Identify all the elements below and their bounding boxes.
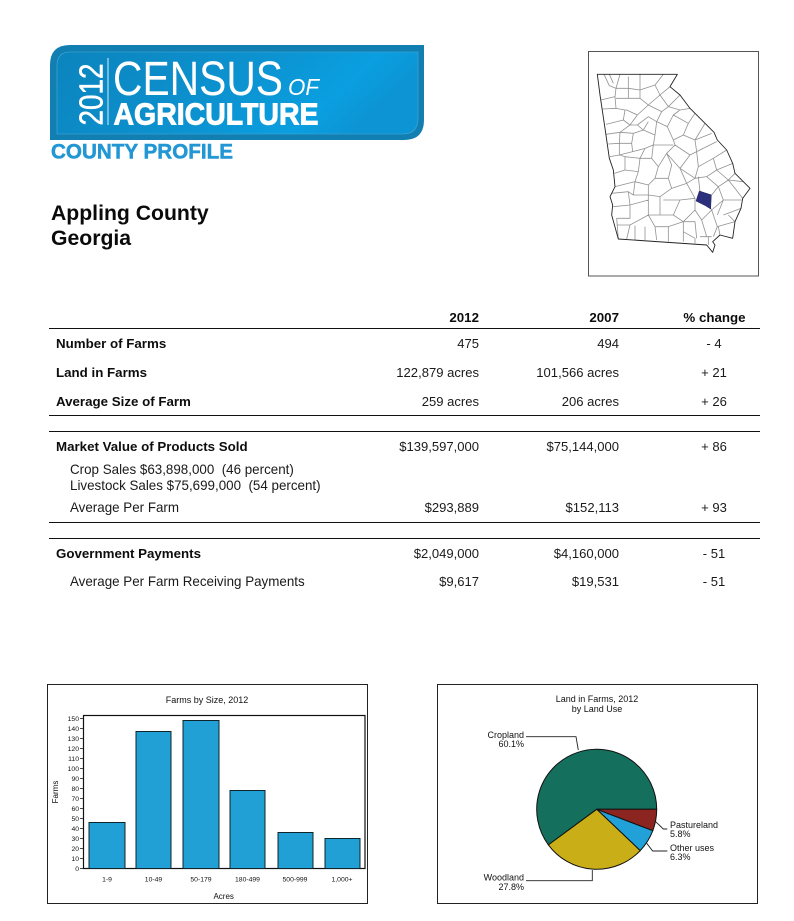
county profile subtitle: COUNTY PROFILE [51,140,233,164]
label: cropland [487,730,524,749]
row: number of farms: - 4 [706,336,722,351]
x axis tick labels: 1-9 [102,876,112,884]
y axis tick labels: 30 [71,836,79,843]
row: land in farms: Land in Farms [56,365,147,380]
bar chart title: Farms by Size, 2012 [166,695,248,705]
row: average per farm: $152,113 [566,500,619,515]
y axis tick labels: 0 [75,866,79,873]
pie chart title: by Land Use [572,704,622,714]
row: number of farms: Number of Farms [56,336,166,351]
x axis tick labels: 10-49 [145,876,162,884]
label: pastureland: Pastureland [670,820,718,830]
pie chart title [556,694,638,714]
x axis tick labels: 500-999 [283,876,308,884]
label: cropland: Cropland [487,730,524,740]
y axis tick labels: 50 [71,816,79,823]
x axis title: Acres [213,892,234,901]
row: market value of products sold [56,439,727,454]
row: number of farms [56,336,722,351]
y axis tick labels: 150 [68,716,79,723]
row: government payments: - 51 [703,546,725,561]
x axis tick labels: 180-499 [235,876,260,884]
panel: farms by size bar chart [48,684,368,904]
map: county boundaries and state outline [597,74,750,252]
row: average per farm receiving payments: Average Per Farm Receiving Payments [70,574,305,589]
y axis tick labels: 140 [68,726,79,733]
table header: % change [683,310,746,325]
y axis tick labels: 40 [71,826,79,833]
row: land in farms: + 21 [701,365,727,380]
y axis tick labels: 70 [71,796,79,803]
row: market value of products sold: $139,597,000 [399,439,479,454]
row: average per farm receiving payments: - 51 [703,574,725,589]
slice: cropland [537,749,657,845]
y axis tick labels: 20 [71,846,79,853]
row: market value of products sold: + 86 [701,439,727,454]
x axis tick labels [102,876,353,884]
row: market value of products sold: Market Value of Products Sold [56,439,248,454]
bar chart plot frame and ticks [80,716,365,868]
row: average per farm: $293,889 [425,500,479,515]
row: government payments [56,546,725,561]
row: average per farm: Average Per Farm [70,500,179,515]
row: government payments: $4,160,000 [554,546,619,561]
label: woodland [484,872,524,892]
label: other uses: Other uses [670,843,715,853]
crop and livestock sales note: Crop Sales $63,898,000 (46 percent) [70,462,294,477]
y axis tick labels [68,716,79,873]
row: land in farms: 122,879 acres [396,365,479,380]
bars [89,720,360,868]
x axis tick labels: 1,000+ [332,876,353,884]
label: woodland: 27.8% [498,882,524,892]
row: average per farm receiving payments: $9,617 [439,574,479,589]
logo year: 2012 [72,64,110,126]
map: Appling County highlighted [696,191,711,209]
label: cropland: 60.1% [498,739,524,749]
table header: 2007 [589,310,619,325]
logo word: agriculture: AGRICULTURE [114,96,318,132]
label: other uses [670,843,715,862]
row: average per farm [70,500,727,515]
row: number of farms: 475 [457,336,479,351]
row: average size of farm [56,394,727,409]
panel: Georgia locator map [588,52,758,276]
y axis tick labels: 80 [71,786,79,793]
x axis tick labels: 50-179 [190,876,212,884]
y axis tick labels: 60 [71,806,79,813]
panel: land use pie chart [438,684,758,904]
row: market value of products sold: $75,144,000 [546,439,619,454]
logo word: of: OF [288,74,321,100]
slice: woodland [548,809,640,869]
label: other uses: 6.3% [670,852,691,862]
logo: Census of Agriculture banner [50,45,424,140]
label: pastureland: 5.8% [670,829,691,839]
heading: county and state: Georgia [51,227,131,250]
crop and livestock sales note [70,462,321,493]
y axis tick labels: 120 [68,746,79,753]
row: average per farm receiving payments [70,574,725,589]
row: average size of farm: + 26 [701,394,727,409]
y axis tick labels: 100 [68,766,79,773]
y axis tick labels: 130 [68,736,79,743]
heading: county and state [51,202,209,250]
row: land in farms [56,365,727,380]
data table [49,310,760,589]
row: number of farms: 494 [597,336,619,351]
table header: 2012 [449,310,479,325]
row: average size of farm: 206 acres [562,394,619,409]
y axis tick labels: 90 [71,776,79,783]
row: average size of farm: 259 acres [422,394,479,409]
pie chart title: Land in Farms, 2012 [556,694,638,704]
row: average size of farm: Average Size of Farm [56,394,191,409]
row: land in farms: 101,566 acres [536,365,619,380]
heading: county and state: Appling County [51,202,209,225]
pie chart [537,749,657,869]
label: pastureland [670,820,718,839]
table header [449,310,746,325]
row: government payments: Government Payments [56,546,201,561]
y axis tick labels: 10 [71,856,79,863]
crop and livestock sales note: Livestock Sales $75,699,000 (54 percent) [70,478,321,493]
leader lines [526,737,667,881]
row: government payments: $2,049,000 [414,546,479,561]
label: woodland: Woodland [484,872,524,882]
row: average per farm receiving payments: $19,531 [572,574,619,589]
y axis tick labels: 110 [68,756,79,763]
logo word: census: CENSUS [113,52,283,106]
row: average per farm: + 93 [701,500,727,515]
y axis title: Farms [51,781,60,803]
slice: other uses [597,809,653,851]
slice: pastureland [597,809,657,831]
